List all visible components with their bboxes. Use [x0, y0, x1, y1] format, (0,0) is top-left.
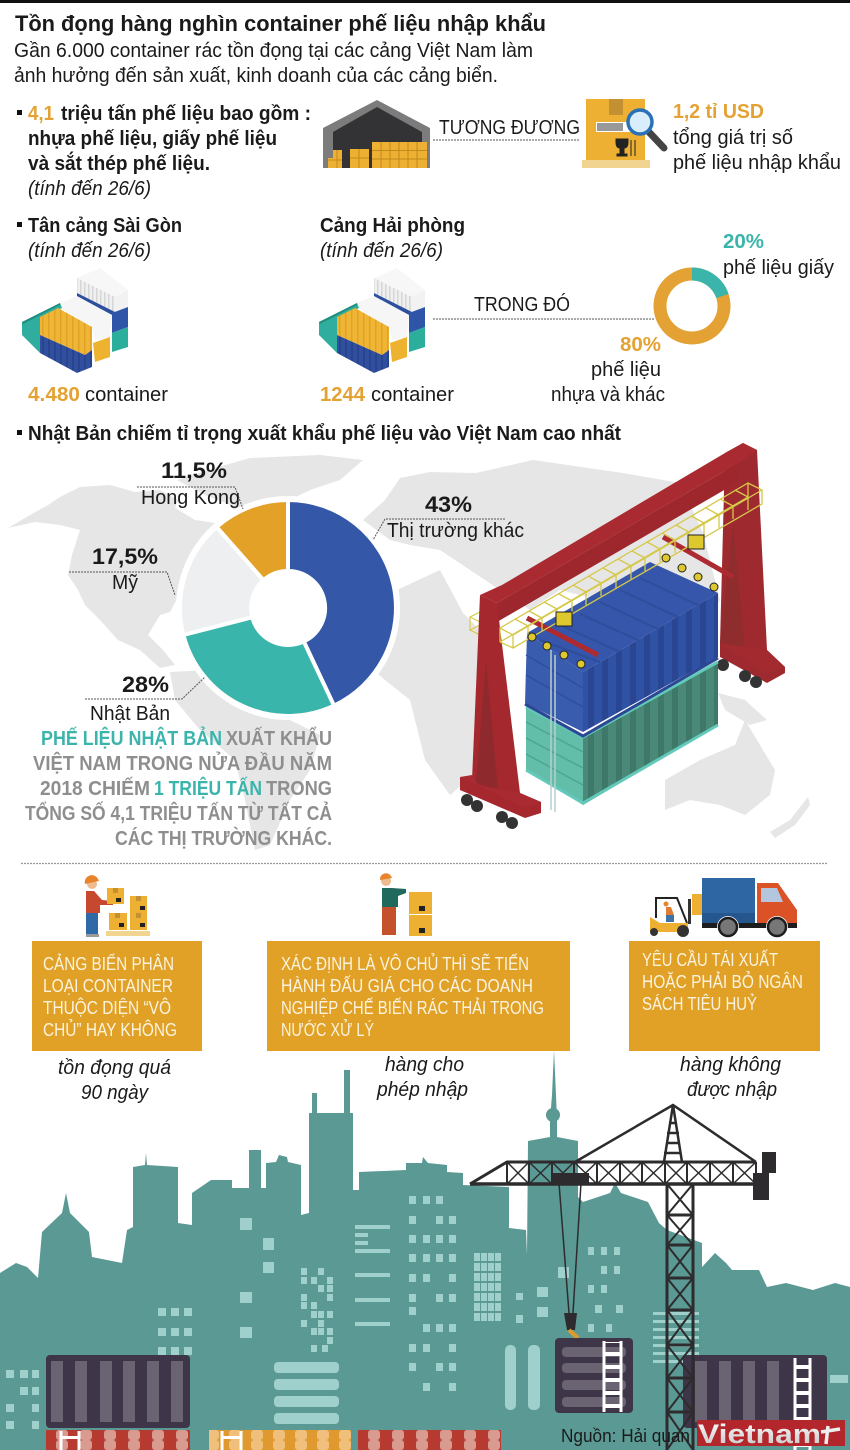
- cables: [559, 1183, 581, 1313]
- caption: prohibited goods: [680, 1054, 781, 1101]
- label: Japan: 28%: [122, 672, 169, 697]
- label: 80 percent plastic and other: phế liệu: [591, 359, 661, 381]
- box: auction: NGHIỆP CHẾ BIẾN RÁC THẢI TRONG: [281, 997, 544, 1018]
- panel: Tan cang Sai Gon: 4.480: [28, 384, 80, 406]
- dark container left: [46, 1355, 190, 1428]
- text block: Japan scrap note: XUẤT KHẨU: [226, 727, 332, 750]
- text block: Japan scrap note: TỔNG SỐ 4,1 TRIỆU TẤN TỪ TẤT CẢ: [25, 801, 332, 825]
- icon: worker scanning boxes: [380, 873, 432, 936]
- caption: permitted goods: phép nhập: [376, 1079, 468, 1101]
- text block: 4,1 million tonnes: nhựa phế liệu, giấy phế liệu: [28, 128, 277, 150]
- label: Hong Kong: [137, 458, 243, 509]
- counterweights: [753, 1152, 776, 1200]
- hanging container: [555, 1330, 633, 1413]
- panel: Tan cang Sai Gon: Tân cảng Sài Gòn: [28, 215, 182, 237]
- stat: 1.2 billion USD: tổng giá trị số: [673, 127, 793, 149]
- caption: over 90 days: 90 ngày: [81, 1082, 149, 1104]
- text block: Japan scrap note: 2018 CHIẾM: [40, 777, 150, 800]
- hoist blocks: [528, 535, 718, 668]
- label: 20 percent paper: 20%: [723, 231, 764, 253]
- label: Japan: [85, 672, 205, 725]
- panel: Tan cang Sai Gon: (tính đến 26/6): [28, 240, 151, 262]
- box: port classification: [32, 941, 202, 1051]
- slice: USA: [180, 527, 264, 635]
- slice: other markets: [288, 500, 396, 706]
- skyline background: [0, 1050, 850, 1450]
- label: Japan: Nhật Bản: [90, 703, 170, 725]
- label: 80 percent plastic and other: [551, 334, 665, 406]
- logo: Vietnam+: Vietnam: [698, 1419, 821, 1449]
- slice: Japan: [183, 617, 334, 716]
- gantry crane with containers: [460, 443, 785, 829]
- donut chart: scrap share: [660, 274, 724, 338]
- top stays: [575, 1105, 756, 1162]
- heading: Japan share: Nhật Bản chiếm tỉ trọng xuất khẩu phế liệu vào Việt Nam cao nhất: [28, 423, 621, 445]
- pie chart: export share: [176, 496, 400, 720]
- label: of which: TRONG ĐÓ: [474, 293, 570, 316]
- intro text: Gần 6.000 container rác tồn đọng tại các cảng Việt Nam làm: [14, 40, 533, 62]
- panel: Cang Hai Phong: (tính đến 26/6): [320, 240, 443, 262]
- box: port classification: CHỦ” HAY KHÔNG: [43, 1019, 177, 1040]
- text block: Japan scrap note: TRONG: [266, 778, 332, 800]
- panel: Cang Hai Phong: [319, 215, 465, 406]
- yellow truss: [500, 483, 762, 648]
- text block: Japan scrap note: [25, 726, 332, 850]
- label: Hong Kong: 11,5%: [161, 458, 227, 483]
- label: other markets: 43%: [425, 492, 472, 517]
- tower crane: [470, 1105, 776, 1450]
- icon: worker stacking boxes: [85, 875, 150, 937]
- dark container right: [683, 1355, 827, 1450]
- icon: inspected box: [582, 99, 664, 168]
- box: re-export: SÁCH TIÊU HUỶ: [642, 993, 757, 1014]
- caption: over 90 days: [58, 1057, 171, 1104]
- panel: Cang Hai Phong: 1244: [320, 384, 366, 406]
- main beam: [480, 453, 740, 622]
- stat: 1.2 billion USD: [673, 101, 841, 174]
- box: auction: HÀNH ĐẤU GIÁ CHO CÁC DOANH: [281, 975, 533, 996]
- text block: Japan scrap note: PHẾ LIỆU NHẬT BẢN: [41, 726, 222, 750]
- text block: 4,1 million tonnes: (tính đến 26/6): [28, 178, 151, 200]
- panel: Tan cang Sai Gon: [17, 215, 182, 406]
- title: Tồn đọng hàng nghìn container phế liệu nhập khẩu: [15, 11, 546, 36]
- orange container: [209, 1430, 351, 1450]
- label: USA: [69, 544, 175, 595]
- text block: Japan scrap note: VIỆT NAM TRONG NỬA ĐẦU NĂM: [33, 751, 332, 775]
- truss stub behind left leg: [470, 612, 484, 637]
- red container center: [358, 1430, 501, 1450]
- blue container: [525, 562, 718, 812]
- hook: [564, 1313, 577, 1330]
- box: auction: [267, 941, 570, 1051]
- caption: permitted goods: hàng cho: [385, 1054, 464, 1076]
- icon: forklift and truck: [650, 878, 797, 938]
- trolley: [552, 1173, 589, 1183]
- text block: Japan scrap note: 1 TRIỆU TẤN: [154, 776, 262, 800]
- label: other markets: [373, 492, 524, 542]
- label: 80 percent plastic and other: 80%: [620, 334, 661, 356]
- right leg: [717, 443, 785, 688]
- stat: 1.2 billion USD: phế liệu nhập khẩu: [673, 152, 841, 174]
- mast: [667, 1184, 693, 1450]
- label: USA: 17,5%: [92, 544, 158, 569]
- panel: Cang Hai Phong: container: [371, 384, 454, 406]
- divider: [21, 862, 827, 864]
- box: re-export: HOẶC PHẢI BỎ NGÂN: [642, 971, 803, 992]
- text block: 4,1 million tonnes: triệu tấn phế liệu bao gồm :: [61, 103, 311, 125]
- box: re-export: YÊU CẦU TÁI XUẤT: [642, 949, 778, 970]
- intro text: ảnh hưởng đến sản xuất, kinh doanh của các cảng biển.: [14, 65, 498, 87]
- red container left: [46, 1430, 190, 1450]
- panel: Tan cang Sai Gon: container: [85, 384, 168, 406]
- caption: permitted goods: [376, 1054, 468, 1101]
- source: Nguồn: Hải quan: [561, 1426, 690, 1446]
- slice: Hong Kong: [217, 500, 288, 580]
- left leg: [460, 595, 541, 829]
- box: port classification: LOẠI CONTAINER: [43, 976, 173, 996]
- caption: prohibited goods: được nhập: [687, 1079, 777, 1101]
- spreader bars: [527, 537, 733, 655]
- panel: Cang Hai Phong: Cảng Hải phòng: [320, 215, 465, 237]
- box: port classification: THUỘC DIỆN “VÔ: [43, 997, 171, 1018]
- label: 80 percent plastic and other: nhựa và khác: [551, 384, 665, 406]
- text block: 4,1 million tonnes: và sắt thép phế liệu.: [28, 151, 210, 175]
- label: 20 percent paper: phế liệu giấy: [723, 257, 834, 279]
- box: auction: NƯỚC XỬ LÝ: [281, 1019, 374, 1040]
- icon: warehouse: [323, 100, 430, 168]
- label: USA: Mỹ: [112, 572, 138, 594]
- box: auction: XÁC ĐỊNH LÀ VÔ CHỦ THÌ SẼ TIẾN: [281, 953, 529, 974]
- text block: 4,1 million tonnes: 4,1: [28, 103, 54, 125]
- caption: prohibited goods: hàng không: [680, 1054, 781, 1076]
- label: Hong Kong: Hong Kong: [141, 487, 240, 509]
- label: equivalent: TƯƠNG ĐƯƠNG: [439, 117, 580, 139]
- building windows: [6, 1196, 848, 1429]
- label: 20 percent paper: [723, 231, 834, 279]
- text block: 4,1 million tonnes: [17, 103, 311, 200]
- bottom containers: [46, 1355, 827, 1450]
- jib: [470, 1162, 756, 1184]
- text block: Japan scrap note: CÁC THỊ TRƯỜNG KHÁC.: [115, 826, 332, 850]
- intro text: [14, 40, 533, 87]
- world map background: [8, 455, 810, 850]
- green container: [526, 662, 718, 805]
- box: port classification: CẢNG BIỂN PHÂN: [43, 953, 174, 974]
- caption: over 90 days: tồn đọng quá: [58, 1057, 171, 1079]
- label: other markets: Thị trường khác: [387, 520, 524, 542]
- box: re-export: [629, 941, 820, 1051]
- stat: 1.2 billion USD: 1,2 tỉ USD: [673, 101, 764, 123]
- top rule: [0, 0, 850, 3]
